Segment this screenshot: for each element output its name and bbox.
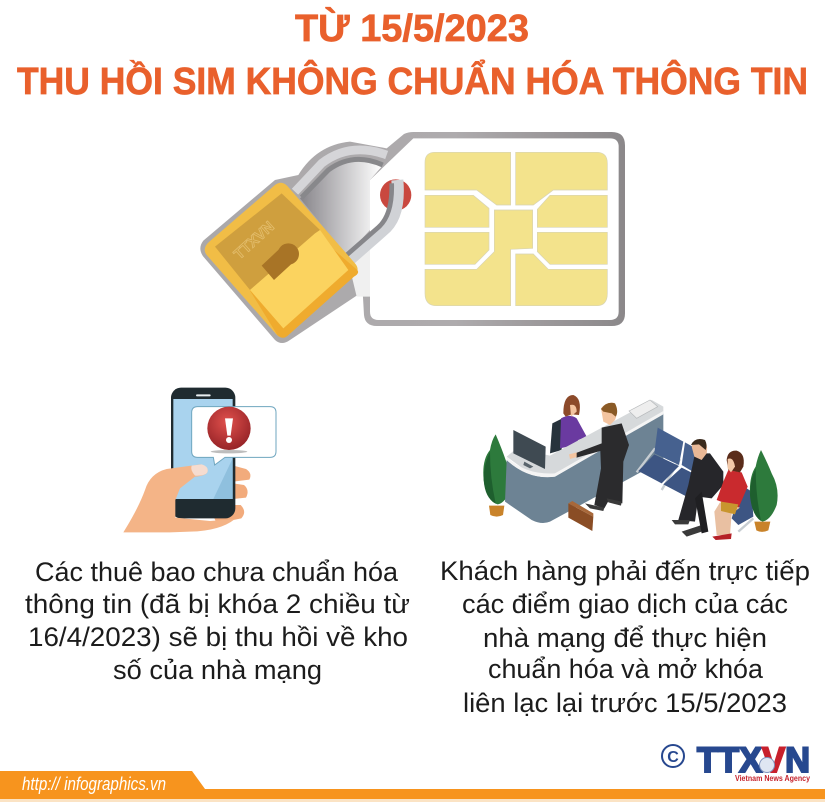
standing customer bbox=[569, 403, 629, 511]
reception desk bbox=[505, 400, 663, 523]
text block: right caption: Khách hàng phải đến trực tiếp bbox=[440, 556, 810, 586]
text block: right caption: chuẩn hóa và mở khóa bbox=[488, 654, 764, 684]
text block: left caption: 16/4/2023) sẽ bị thu hồi về kho bbox=[28, 622, 408, 652]
seated woman bbox=[712, 451, 748, 540]
illustration: customers at a service counter bbox=[483, 395, 778, 540]
padlock body bbox=[205, 183, 358, 338]
text block: right caption: nhà mạng để thực hiện bbox=[483, 623, 767, 653]
logo: TTXVN: TTXVN bbox=[697, 741, 810, 780]
title: TỪ 15/5/2023 bbox=[295, 6, 529, 50]
title bbox=[17, 6, 808, 103]
left plant bbox=[483, 434, 511, 517]
SIM chip contacts bbox=[425, 152, 607, 306]
illustration: locked SIM card bbox=[200, 132, 625, 343]
lock watermark: TTXVN bbox=[231, 219, 278, 263]
computer monitor bbox=[513, 430, 546, 469]
logo: TTXVN: C bbox=[667, 749, 679, 766]
text block: left caption bbox=[25, 557, 410, 685]
icon: hand holding phone with alert bbox=[123, 388, 276, 532]
text block: right caption bbox=[440, 556, 810, 718]
waiting chairs bbox=[637, 428, 753, 532]
footer band bbox=[0, 771, 825, 802]
alert bubble bbox=[192, 407, 276, 465]
SIM card body bbox=[370, 138, 619, 320]
right plant bbox=[750, 450, 778, 532]
receptionist bbox=[550, 395, 587, 453]
phone screen bbox=[173, 399, 233, 499]
briefcase bbox=[568, 501, 593, 531]
text block: left caption: Các thuê bao chưa chuẩn hóa bbox=[35, 557, 399, 587]
hand and thumb bbox=[123, 464, 235, 532]
text block: left caption: số của nhà mạng bbox=[113, 655, 322, 685]
fingers bbox=[210, 466, 250, 523]
SIM card and lock outer rim bbox=[200, 132, 625, 343]
shackle bbox=[295, 150, 411, 259]
alert symbol bbox=[207, 407, 251, 450]
shaded hollow behind shackle bbox=[300, 160, 382, 255]
footer band: http:// infographics.vn bbox=[22, 774, 166, 794]
sliver between lock and SIM bbox=[347, 232, 370, 297]
logo: TTXVN: Vietnam News Agency bbox=[735, 773, 810, 783]
phone body bbox=[171, 388, 235, 518]
text block: left caption: thông tin (đã bị khóa 2 chiều từ bbox=[25, 589, 410, 619]
text block: right caption: liên lạc lại trước 15/5/2023 bbox=[463, 688, 787, 718]
text block: right caption: các điểm giao dịch của các bbox=[462, 589, 788, 619]
keyhole bbox=[262, 243, 299, 280]
seated man bbox=[672, 439, 723, 537]
